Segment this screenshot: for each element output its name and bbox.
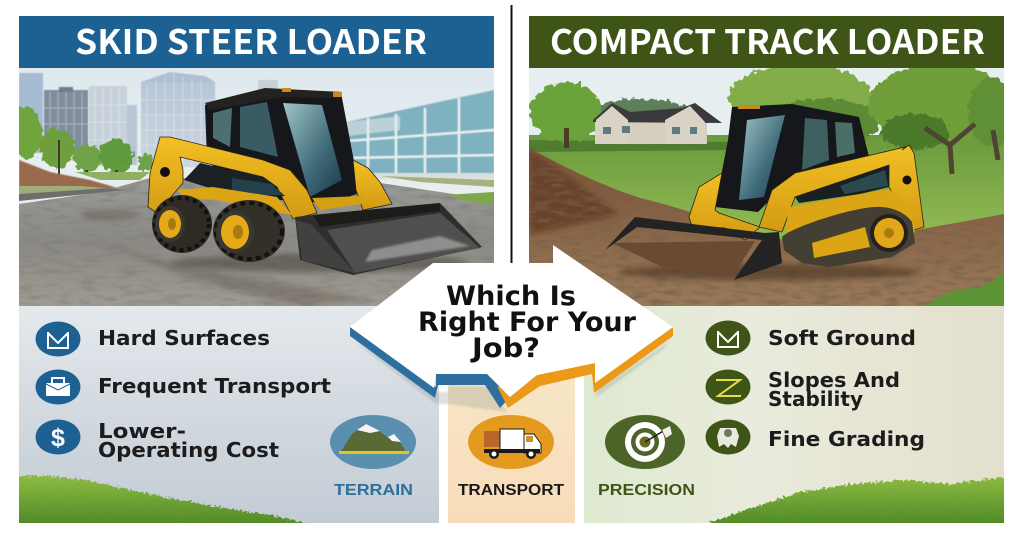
panel: comparison centre (448, 372, 575, 523)
icon: slopes and stability (706, 370, 750, 404)
icon: frequent transport (36, 370, 80, 404)
house (593, 103, 722, 144)
icon: yellow compact track loader (605, 104, 924, 280)
icon: lower operating cost: $ (51, 424, 65, 452)
icon: transport truck (468, 415, 554, 469)
cab (205, 90, 360, 203)
text: soft ground: Soft Ground (768, 326, 916, 350)
grass (710, 476, 1004, 523)
bucket (612, 241, 755, 277)
scene: rural yard (529, 64, 1016, 310)
cab (715, 104, 870, 212)
arrow shadow (352, 340, 668, 412)
divider (510, 5, 512, 271)
text: question: Right For Your (418, 307, 637, 338)
icon: precision target (605, 415, 685, 469)
icon: hard surfaces (36, 322, 80, 356)
ground (529, 148, 1004, 306)
text: fine grading: Fine Grading (768, 427, 925, 451)
heading: skid steer loader (19, 15, 494, 68)
lift arm (759, 145, 924, 232)
lift arm (148, 137, 317, 219)
bucket (295, 203, 482, 275)
panel: skid steer loader (12, 15, 494, 306)
text: question: Which Is (446, 281, 576, 312)
trees (12, 107, 154, 173)
scene: city street (12, 68, 494, 306)
icon: terrain (330, 415, 416, 469)
panel: compact track loader (529, 15, 1016, 310)
arrow left blue edge (350, 327, 510, 408)
text: frequent transport: Frequent Transport (98, 374, 331, 398)
heading: skid steer loader: SKID STEER LOADER (75, 15, 427, 64)
rear fender (353, 160, 392, 210)
icon: soft ground (706, 320, 750, 356)
icon: lower operating cost (36, 420, 80, 454)
text: lower operating cost: Operating Cost (98, 438, 279, 462)
arrow right orange edge (497, 327, 673, 408)
text: slopes and stability (768, 368, 900, 411)
heading: compact track loader: COMPACT TRACK LOADER (550, 15, 985, 64)
label: precision: PRECISION (598, 482, 695, 499)
text: slopes and stability: Stability (768, 387, 863, 411)
text: hard surfaces: Hard Surfaces (98, 326, 270, 350)
panel: skid steer benefits (10, 306, 439, 530)
grass (19, 474, 307, 523)
icon: fine grading (706, 420, 750, 454)
label: terrain: TERRAIN (334, 482, 413, 499)
label: transport: TRANSPORT (458, 482, 564, 499)
track (782, 207, 915, 267)
arrow body (350, 245, 673, 397)
panel: compact track benefits (584, 306, 1012, 530)
callout: which is right for your job (350, 245, 673, 412)
wheels (152, 195, 285, 262)
front fender (689, 173, 760, 240)
road (19, 178, 494, 306)
text: slopes and stability: Slopes And (768, 368, 900, 392)
icon: yellow skid steer loader (148, 88, 482, 275)
text: lower operating cost: Lower- (98, 419, 186, 443)
text: lower operating cost (98, 419, 279, 462)
text: question (418, 281, 637, 364)
text: question: Job? (470, 333, 540, 364)
